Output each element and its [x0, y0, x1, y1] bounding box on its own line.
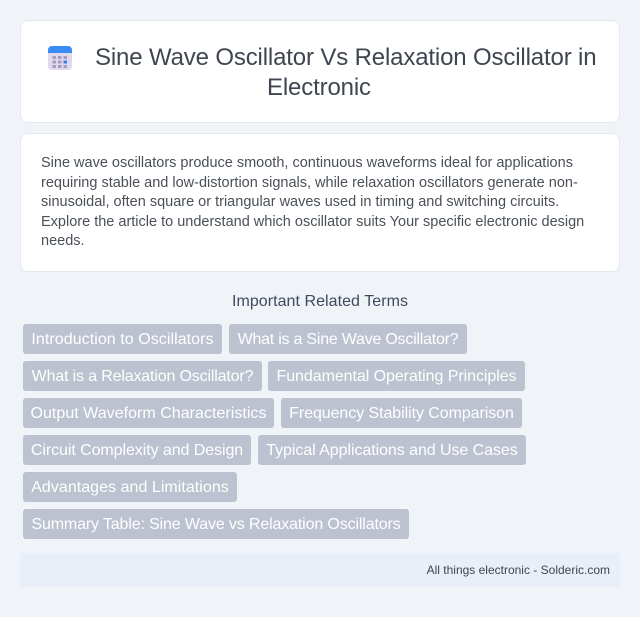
icon: calendar [48, 46, 72, 70]
tag: Output Waveform Characteristics [31, 405, 266, 422]
title: Electronic [267, 74, 371, 101]
tag [23, 324, 222, 354]
tag [23, 398, 274, 428]
tag: Typical Applications and Use Cases [266, 442, 518, 459]
tag: Summary Table: Sine Wave vs Relaxation Oscillators [31, 516, 401, 533]
text block: description: sinusoidal, often square or triangular waves used in timing and switching circuits. [41, 194, 559, 210]
tag [23, 435, 251, 465]
text block: description: requiring stable and low-distortion signals, while relaxation oscillators generate non- [41, 175, 578, 191]
heading: related terms: Important Related Terms [232, 293, 408, 310]
text block: description: needs. [41, 233, 85, 249]
tag [23, 509, 409, 539]
panel: title card [20, 20, 620, 123]
panel: description card [20, 133, 620, 272]
tag: What is a Relaxation Oscillator? [32, 368, 253, 385]
tag [23, 361, 262, 391]
tag: What is a Sine Wave Oscillator? [238, 331, 458, 348]
tag [229, 324, 467, 354]
tag: Introduction to Oscillators [31, 331, 214, 348]
tag: Circuit Complexity and Design [31, 442, 243, 459]
footer [20, 553, 620, 587]
text block: description [41, 155, 584, 249]
title [95, 44, 596, 101]
text block: description: Explore the article to understand which oscillator suits Your specific electronic design [41, 214, 584, 230]
text block: description: Sine wave oscillators produce smooth, continuous waveforms ideal for applications [41, 155, 573, 171]
tag: Frequency Stability Comparison [289, 405, 514, 422]
tag [23, 472, 237, 502]
tag [281, 398, 522, 428]
tag [268, 361, 525, 391]
tag: Fundamental Operating Principles [276, 368, 516, 385]
tag: Advantages and Limitations [31, 479, 229, 496]
tag [258, 435, 526, 465]
tag list [23, 324, 526, 539]
title: Sine Wave Oscillator Vs Relaxation Oscillator in [95, 44, 596, 71]
footer: All things electronic - Solderic.com [427, 563, 610, 577]
